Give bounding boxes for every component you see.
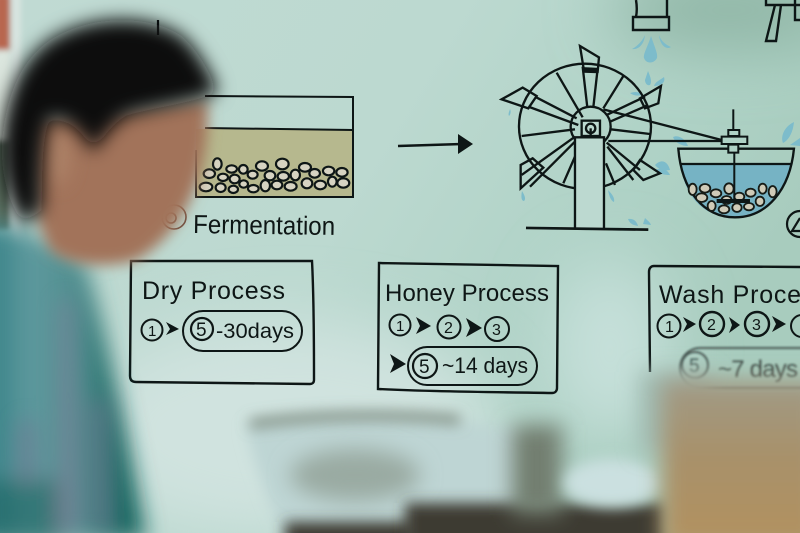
spokes xyxy=(522,67,650,187)
support post xyxy=(575,137,604,228)
blurred person in foreground xyxy=(0,20,218,533)
machine at top right xyxy=(766,0,800,41)
step 5 and days on wash card, softened by foreground: ~7 days xyxy=(718,356,798,383)
ground line xyxy=(526,228,648,230)
honey steps: 5 xyxy=(419,357,430,378)
dry steps: -30days xyxy=(216,320,294,343)
water pipe above wheel xyxy=(633,0,669,30)
dry steps: 5 xyxy=(196,320,207,341)
rim xyxy=(519,64,651,189)
dry steps: 1 xyxy=(148,323,156,340)
step 5 and days on wash card, softened by foreground: 5 xyxy=(689,356,700,377)
wash steps xyxy=(658,312,800,338)
fermentation tank icon xyxy=(196,96,353,197)
tick mark at top xyxy=(157,20,159,35)
drive rods xyxy=(603,109,722,141)
stirrer shaft and paddle xyxy=(717,109,750,201)
honey process card xyxy=(378,263,558,393)
honey steps: 2 xyxy=(444,320,453,337)
ear xyxy=(46,125,70,185)
beans in bowl xyxy=(689,183,777,213)
wash heading: Wash Proce xyxy=(659,281,800,309)
wash steps: 3 xyxy=(752,317,761,334)
water wheel xyxy=(502,46,722,230)
wash process card xyxy=(649,266,800,372)
hub xyxy=(582,121,600,136)
honey steps: ~14 days xyxy=(442,353,528,378)
step 4 circle, cut by frame xyxy=(787,211,800,237)
hair xyxy=(2,20,218,224)
honey steps: 3 xyxy=(492,322,501,339)
paddles xyxy=(580,46,599,72)
window edge at left xyxy=(0,0,21,244)
stirring bowl with beans xyxy=(678,109,794,217)
step 5 and days on wash card, softened by foreground xyxy=(680,348,800,388)
honey steps: 1 xyxy=(396,318,404,335)
step 3 circle xyxy=(162,205,186,229)
water splashes xyxy=(509,35,800,226)
fermentation label: Fermentation xyxy=(193,209,335,241)
dry steps xyxy=(142,311,302,351)
neck and face xyxy=(30,100,208,265)
honey steps xyxy=(390,314,537,385)
chart line art xyxy=(130,0,800,393)
dry heading: Dry Process xyxy=(142,277,285,305)
blurred tan box in foreground xyxy=(640,372,800,533)
arrow to water wheel xyxy=(398,134,473,154)
coffee beans in tank xyxy=(200,158,349,193)
wash steps: 2 xyxy=(707,317,716,334)
dry process card xyxy=(130,261,314,384)
shirt xyxy=(0,222,146,533)
blurred pot in foreground xyxy=(246,416,665,533)
wash steps: 1 xyxy=(665,319,674,336)
honey heading: Honey Process xyxy=(385,280,549,307)
